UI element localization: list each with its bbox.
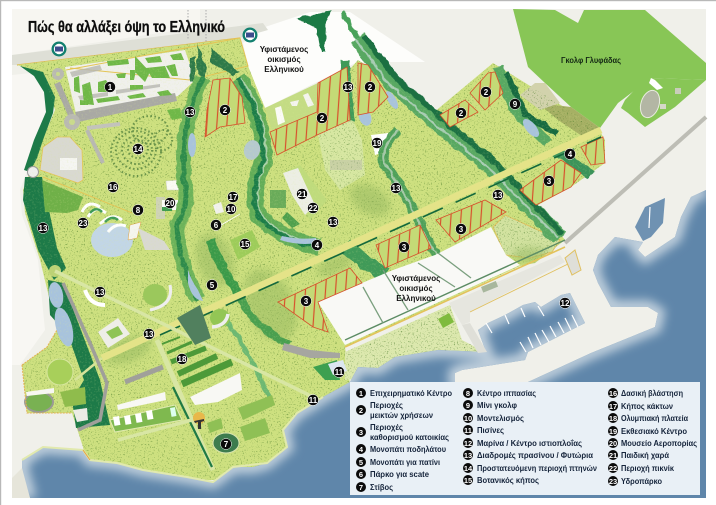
legend item 22: 22: [609, 464, 617, 473]
marker 22: 22: [309, 204, 318, 213]
white settlement south: [318, 227, 520, 345]
marker 1: [104, 82, 116, 92]
marker 2: 2: [223, 106, 228, 115]
marker 4: 4: [315, 241, 320, 250]
marker 9: 9: [513, 100, 518, 109]
western dark green belt: [20, 66, 110, 428]
marker 5: 5: [210, 281, 215, 290]
legend item 18: Ολυμπιακή πλατεία: [621, 414, 688, 423]
marker 13: [38, 222, 48, 234]
label: existing settlement south: [392, 274, 440, 303]
marker 13: 13: [145, 330, 154, 339]
marker 2: [220, 104, 230, 116]
marker 7: 7: [224, 440, 229, 449]
legend item 2: Περιοχές: [370, 401, 403, 410]
legend item 8: 8: [466, 389, 470, 398]
green corridors: [177, 10, 591, 400]
marker 19: [372, 138, 382, 148]
marker 13: [342, 82, 354, 92]
marker 13: [184, 106, 196, 118]
legend item 7: [356, 482, 393, 492]
label: existing settlement north: Ελληνικού: [264, 65, 304, 74]
Glyfada golf course: [513, 9, 706, 128]
legend item 10: Μοντελισμός: [477, 414, 524, 423]
legend item 14: 14: [464, 464, 473, 473]
marker 3: [544, 176, 554, 186]
darker woodland patches: [101, 177, 548, 369]
marker 14: 14: [134, 145, 143, 154]
marker 13: 13: [186, 108, 195, 117]
legend item 2: 2: [359, 406, 363, 415]
marker 21: 21: [298, 190, 307, 199]
marker 20: [164, 198, 176, 208]
marker 10: 10: [227, 205, 236, 214]
marker 7: [220, 438, 232, 450]
marker 11: [308, 394, 318, 406]
sea: [12, 190, 706, 498]
marker 11: [334, 366, 344, 378]
marker 5: [206, 280, 218, 290]
marker 13: 13: [96, 288, 105, 297]
marker 13: 13: [329, 218, 338, 227]
sports and leisure blocks centre: [213, 83, 390, 260]
legend item 1: 1: [359, 389, 363, 398]
label: existing settlement north: Υφιστάμενος: [260, 45, 308, 54]
marker 3: [398, 242, 410, 252]
marker 3: 3: [402, 243, 407, 252]
legend item 5: 5: [359, 458, 363, 467]
legend item 2: [356, 401, 434, 420]
legend item 3: Περιοχές: [370, 423, 403, 432]
legend item 21: 21: [609, 451, 617, 460]
legend item 22: Περιοχή πικνίκ: [621, 464, 675, 473]
map number markers: [38, 82, 576, 450]
legend item 23: Υδροπάρκο: [621, 477, 662, 486]
horse field and water park: [42, 180, 170, 250]
light foliage mottling: [12, 30, 612, 490]
legend item 15: Βοτανικός κήπος: [477, 476, 539, 485]
coastal highway: [12, 10, 706, 243]
marker 2: 2: [368, 83, 373, 92]
marker 18: [176, 354, 188, 364]
marker 4: [564, 148, 576, 160]
marker 4: 4: [568, 150, 573, 159]
legend item 9: 9: [466, 401, 470, 410]
marker 11: 11: [335, 368, 344, 377]
legend item 8: Κέντρο ιππασίας: [477, 389, 536, 398]
marker 12: 12: [561, 299, 570, 308]
legend item 11: [463, 425, 504, 435]
marker 9: [510, 98, 520, 110]
marker 8: [132, 204, 144, 216]
legend item 16: Δασική βλάστηση: [621, 389, 683, 398]
legend item 15: 15: [464, 476, 472, 485]
legend item 13: Διαδρομές πρασίνου / Φυτώρια: [477, 451, 593, 460]
aviation museum: [162, 180, 182, 211]
boulevard: [75, 130, 601, 380]
legend item 16: [608, 388, 683, 398]
legend item 3: [356, 423, 449, 442]
marker 6: 6: [214, 221, 219, 230]
marker 17: [228, 192, 238, 202]
legend item 19: Εκθεσιακό Κέντρο: [621, 427, 687, 436]
roundabouts and north-west roads: [28, 68, 80, 277]
marker 18: 18: [178, 355, 187, 364]
label: existing settlement south: Ελληνικού: [396, 294, 436, 303]
stadiums and grey roads: [63, 283, 347, 430]
marina quay and piers: [345, 240, 581, 353]
marker 3: [456, 224, 466, 234]
marker 2: [480, 86, 492, 98]
legend item 19: 19: [609, 427, 617, 436]
marker 3: [300, 296, 312, 306]
legend item 9: Μίνι γκολφ: [477, 401, 517, 410]
legend item 10: [463, 413, 524, 423]
marker 13: 13: [39, 224, 48, 233]
legend item 3: καθορισμού κατοικίας: [370, 433, 449, 442]
legend item 17: [608, 401, 674, 411]
legend item 17: Κήπος κάκτων: [621, 402, 674, 411]
title: Πώς θα αλλάξει όψη το Ελληνικό: [28, 19, 225, 36]
legend item 20: Μουσείο Αεροπορίας: [621, 439, 697, 448]
marker 4: [312, 240, 322, 250]
southern buildings and fields: [110, 373, 275, 453]
marker 12: [560, 298, 570, 308]
business centre: [57, 38, 248, 122]
Olympic plaza fields: [162, 337, 232, 384]
metro station icon west: [52, 42, 66, 56]
legend item 23: [608, 476, 662, 486]
legend item 18: 18: [609, 414, 617, 423]
legend item 4: Μονοπάτι ποδηλάτου: [370, 445, 446, 454]
marker 13: [94, 286, 106, 298]
legend item 6: Πάρκο για scate: [370, 470, 430, 479]
label: Glyfada golf: Γκολφ Γλυφάδας: [561, 56, 621, 65]
legend item 23: 23: [609, 477, 617, 486]
marker 21: [296, 188, 308, 200]
legend item 8: [463, 388, 536, 398]
marker 10: [226, 204, 236, 214]
marker 3: 3: [547, 177, 552, 186]
marker 2: 2: [320, 114, 325, 123]
airport buildings: [40, 124, 132, 213]
label: existing settlement north: [260, 45, 308, 74]
legend item 13: 13: [464, 451, 472, 460]
legend item 16: 16: [609, 389, 617, 398]
marker 16: 16: [109, 183, 118, 192]
marker 13: [328, 216, 338, 228]
legend item 22: [608, 463, 675, 473]
legend item 12: Μαρίνα / Κέντρο ιστιοπλοΐας: [477, 439, 582, 448]
vegetation speckle: [12, 30, 612, 490]
marker 2: [364, 82, 376, 92]
marker 3: 3: [304, 297, 309, 306]
marker 23: 23: [79, 219, 88, 228]
marker 13: 13: [494, 191, 503, 200]
legend item 3: 3: [359, 428, 363, 437]
marker 13: 13: [344, 83, 353, 92]
marker 23: [78, 218, 88, 228]
marker 1: 1: [108, 83, 113, 92]
legend item 20: 20: [609, 439, 617, 448]
lower settlement lanes: [363, 253, 471, 323]
marker 2: 2: [459, 109, 464, 118]
marker 13: [492, 190, 504, 200]
legend item 1: Επιχειρηματικό Κέντρο: [370, 389, 452, 398]
legend item 6: 6: [359, 470, 363, 479]
diagonal and north-south promenades: [55, 271, 313, 470]
park land: [17, 38, 605, 480]
marker 2: [456, 108, 466, 118]
legend item 11: 11: [464, 426, 472, 435]
legend item 7: Στίβος: [370, 483, 393, 492]
marker 2: 2: [484, 88, 489, 97]
marker 22: [308, 202, 318, 214]
protected birds forest: [111, 116, 172, 176]
marker 16: [108, 182, 118, 192]
label: existing settlement north: οικισμός: [267, 55, 301, 64]
corridor ponds: [188, 89, 542, 301]
marker 19: 19: [373, 139, 382, 148]
legend item 11: Πισίνες: [477, 426, 504, 435]
legend item 9: [463, 400, 517, 410]
legend item 10: 10: [464, 414, 472, 423]
marker 8: 8: [136, 206, 141, 215]
marker 13: 13: [392, 184, 401, 193]
legend item 4: 4: [359, 445, 364, 454]
legend item 18: [608, 413, 688, 423]
lakes: [47, 223, 133, 348]
marker 15: 15: [241, 240, 250, 249]
marker 20: 20: [166, 199, 175, 208]
marker 6: [210, 220, 222, 230]
label: existing settlement south: Υφιστάμενος: [392, 274, 440, 283]
hatched mixed-use and residential parcels: [205, 63, 605, 332]
marker 3: 3: [459, 225, 464, 234]
western sports grounds: [22, 330, 88, 422]
marker 15: [240, 238, 250, 250]
legend item 21: [608, 450, 669, 460]
legend panel: [350, 382, 700, 495]
legend item 21: Παιδική χαρά: [621, 451, 669, 460]
legend item 12: 12: [464, 439, 472, 448]
label: existing settlement south: οικισμός: [399, 284, 433, 293]
marker 13: [144, 328, 154, 340]
marker 17: 17: [229, 193, 238, 202]
marker 14: [132, 144, 144, 154]
marker 2: [316, 112, 328, 124]
legend item 7: 7: [359, 483, 363, 492]
marker 11: 11: [309, 396, 318, 405]
legend item 17: 17: [609, 402, 617, 411]
marker 13: [390, 182, 402, 194]
legend item 14: Προστατευόμενη περιοχή πτηνών: [477, 464, 598, 473]
metro station icon east: [242, 28, 258, 42]
legend item 5: Μονοπάτι για πατίνι: [370, 458, 440, 467]
legend item 2: μεικτών χρήσεων: [370, 411, 434, 420]
